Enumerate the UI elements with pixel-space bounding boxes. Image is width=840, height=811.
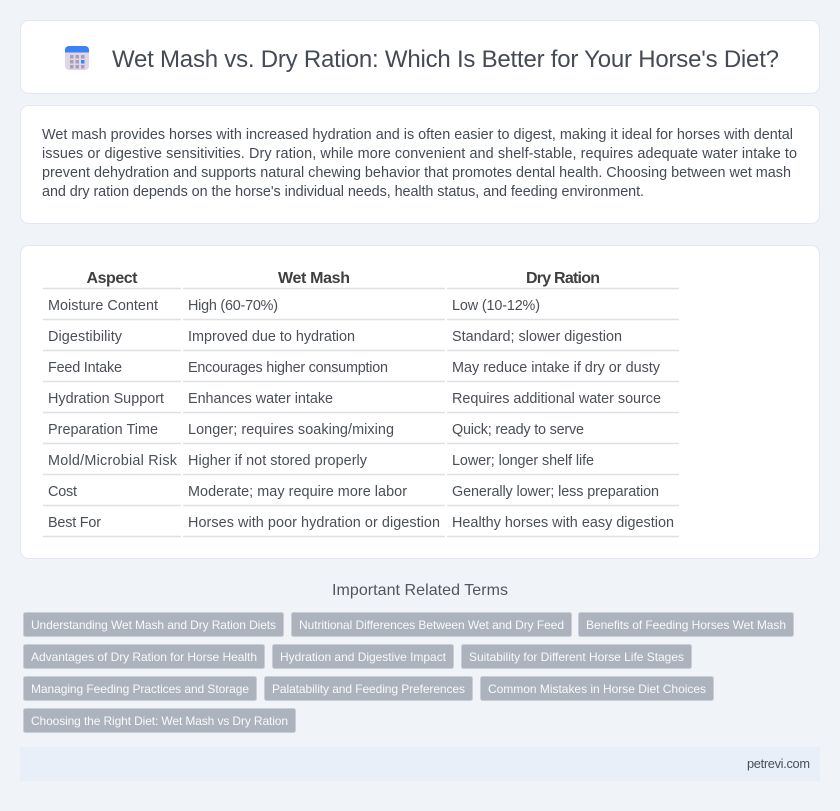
row: best for: Healthy horses with easy digestion	[452, 515, 674, 531]
panel: header	[20, 20, 820, 94]
icon: calendar	[65, 46, 89, 70]
tag	[24, 612, 284, 636]
tag: Suitability for Different Horse Life Stages	[469, 650, 684, 664]
tag: Advantages of Dry Ration for Horse Health	[31, 650, 257, 664]
text block: introduction: Wet mash provides horses with increased hydration and is often easier to digest, making it ideal for horses with dental	[42, 127, 793, 143]
tag: Nutritional Differences Between Wet and Dry Feed	[299, 618, 564, 632]
row: digestibility: Standard; slower digestion	[452, 329, 622, 345]
table header: Dry Ration	[526, 270, 600, 287]
row: mold/microbial risk: Lower; longer shelf life	[452, 453, 594, 469]
row: best for: Horses with poor hydration or digestion	[188, 515, 440, 531]
row: cost: Moderate; may require more labor	[188, 484, 407, 500]
tag: Choosing the Right Diet: Wet Mash vs Dry Ration	[31, 714, 288, 728]
row: feed intake: May reduce intake if dry or dusty	[452, 360, 661, 376]
text block: introduction: prevent dehydration and supports natural chewing behavior that promotes dental health. Choosing between wet mash	[42, 165, 791, 181]
row: preparation time	[48, 422, 584, 438]
tag: Benefits of Feeding Horses Wet Mash	[586, 618, 786, 632]
row: preparation time: Longer; requires soaking/mixing	[188, 422, 394, 438]
row: feed intake: Encourages higher consumption	[188, 360, 388, 376]
row: digestibility	[48, 329, 622, 345]
row: best for: Best For	[48, 515, 101, 531]
tag	[24, 708, 296, 732]
table header: Aspect	[86, 270, 138, 287]
tag	[24, 644, 264, 668]
title: Wet Mash vs. Dry Ration: Which Is Better for Your Horse's Diet?	[112, 46, 779, 73]
row: hydration support: Requires additional water source	[452, 391, 661, 407]
row: cost	[48, 484, 659, 500]
tag	[462, 644, 692, 668]
panel: introduction	[20, 106, 820, 224]
row: mold/microbial risk	[48, 453, 594, 469]
row: feed intake	[48, 360, 661, 376]
row: cost: Generally lower; less preparation	[452, 484, 659, 500]
footer	[20, 747, 820, 781]
row: mold/microbial risk: Higher if not stored properly	[188, 453, 368, 469]
tag	[264, 676, 472, 700]
tag	[292, 612, 572, 636]
row: hydration support: Hydration Support	[48, 391, 164, 407]
tag	[480, 676, 714, 700]
tag	[272, 644, 454, 668]
tag	[24, 676, 256, 700]
row: hydration support	[48, 391, 661, 407]
row: moisture content: Low (10-12%)	[452, 298, 540, 314]
tag: Understanding Wet Mash and Dry Ration Diets	[31, 618, 276, 632]
text block: introduction: issues or digestive sensitivities. Dry ration, while more convenient and shelf-stable, requires adequate water intake to	[42, 146, 797, 162]
row: best for	[48, 515, 674, 531]
tag: Palatability and Feeding Preferences	[272, 682, 465, 696]
row: preparation time: Quick; ready to serve	[452, 422, 584, 438]
panel: comparison table	[20, 246, 820, 558]
tag: Hydration and Digestive Impact	[280, 650, 447, 664]
row: cost: Cost	[48, 484, 77, 500]
row: digestibility: Digestibility	[48, 329, 123, 345]
footer source text: petrevi.com	[747, 756, 810, 771]
text block: introduction: and dry ration depends on the horse's individual needs, health status, and feeding environment.	[42, 184, 644, 200]
heading: related terms: Important Related Terms	[332, 582, 508, 599]
row: feed intake: Feed Intake	[48, 360, 122, 376]
row: moisture content: High (60-70%)	[188, 298, 278, 314]
row: moisture content: Moisture Content	[48, 298, 158, 314]
table header	[86, 270, 600, 287]
row: mold/microbial risk: Mold/Microbial Risk	[48, 453, 178, 469]
tag group: related terms	[24, 612, 794, 732]
tag	[578, 612, 794, 636]
row: hydration support: Enhances water intake	[188, 391, 333, 407]
tag: Common Mistakes in Horse Diet Choices	[488, 682, 706, 696]
row: moisture content	[48, 298, 540, 314]
row: digestibility: Improved due to hydration	[188, 329, 355, 345]
text block: introduction	[42, 127, 797, 200]
tag: Managing Feeding Practices and Storage	[31, 682, 249, 696]
table header: Wet Mash	[278, 270, 350, 287]
row: preparation time: Preparation Time	[48, 422, 158, 438]
